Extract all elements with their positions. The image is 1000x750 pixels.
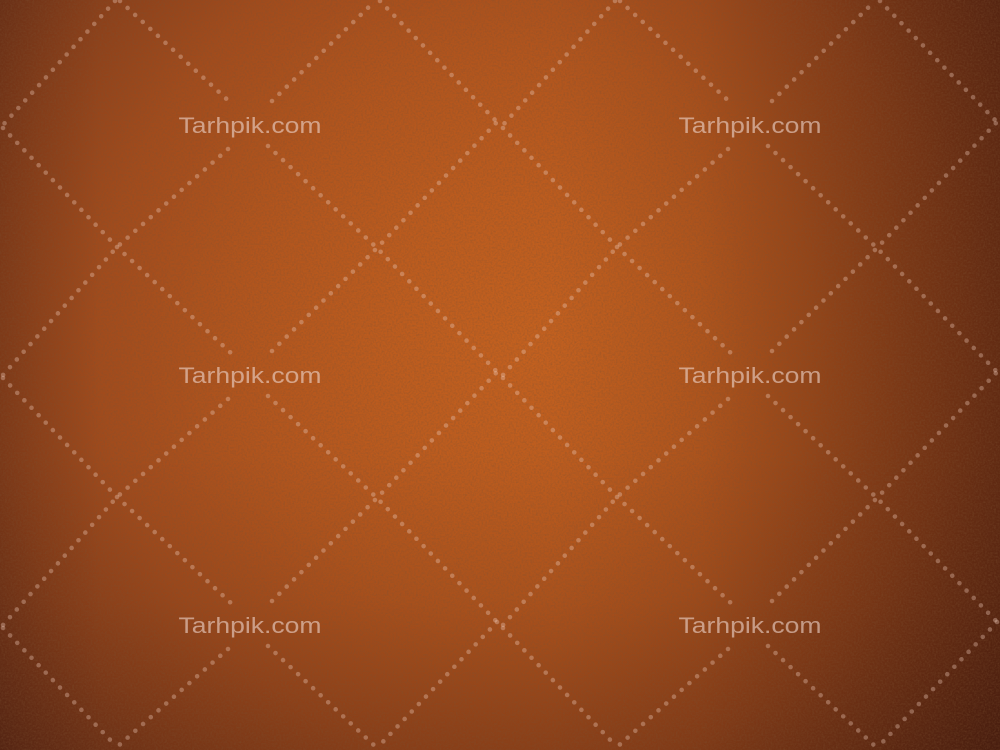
watermark text: middle right: Tarhpik.com — [678, 363, 822, 388]
watermark text: bottom right: Tarhpik.com — [678, 613, 822, 638]
watermark text: top right: Tarhpik.com — [678, 113, 822, 138]
watermark text: bottom left: Tarhpik.com — [178, 613, 322, 638]
watermark text: top left: Tarhpik.com — [178, 113, 322, 138]
watermark text: middle left: Tarhpik.com — [178, 363, 322, 388]
watermark labels — [178, 113, 822, 638]
